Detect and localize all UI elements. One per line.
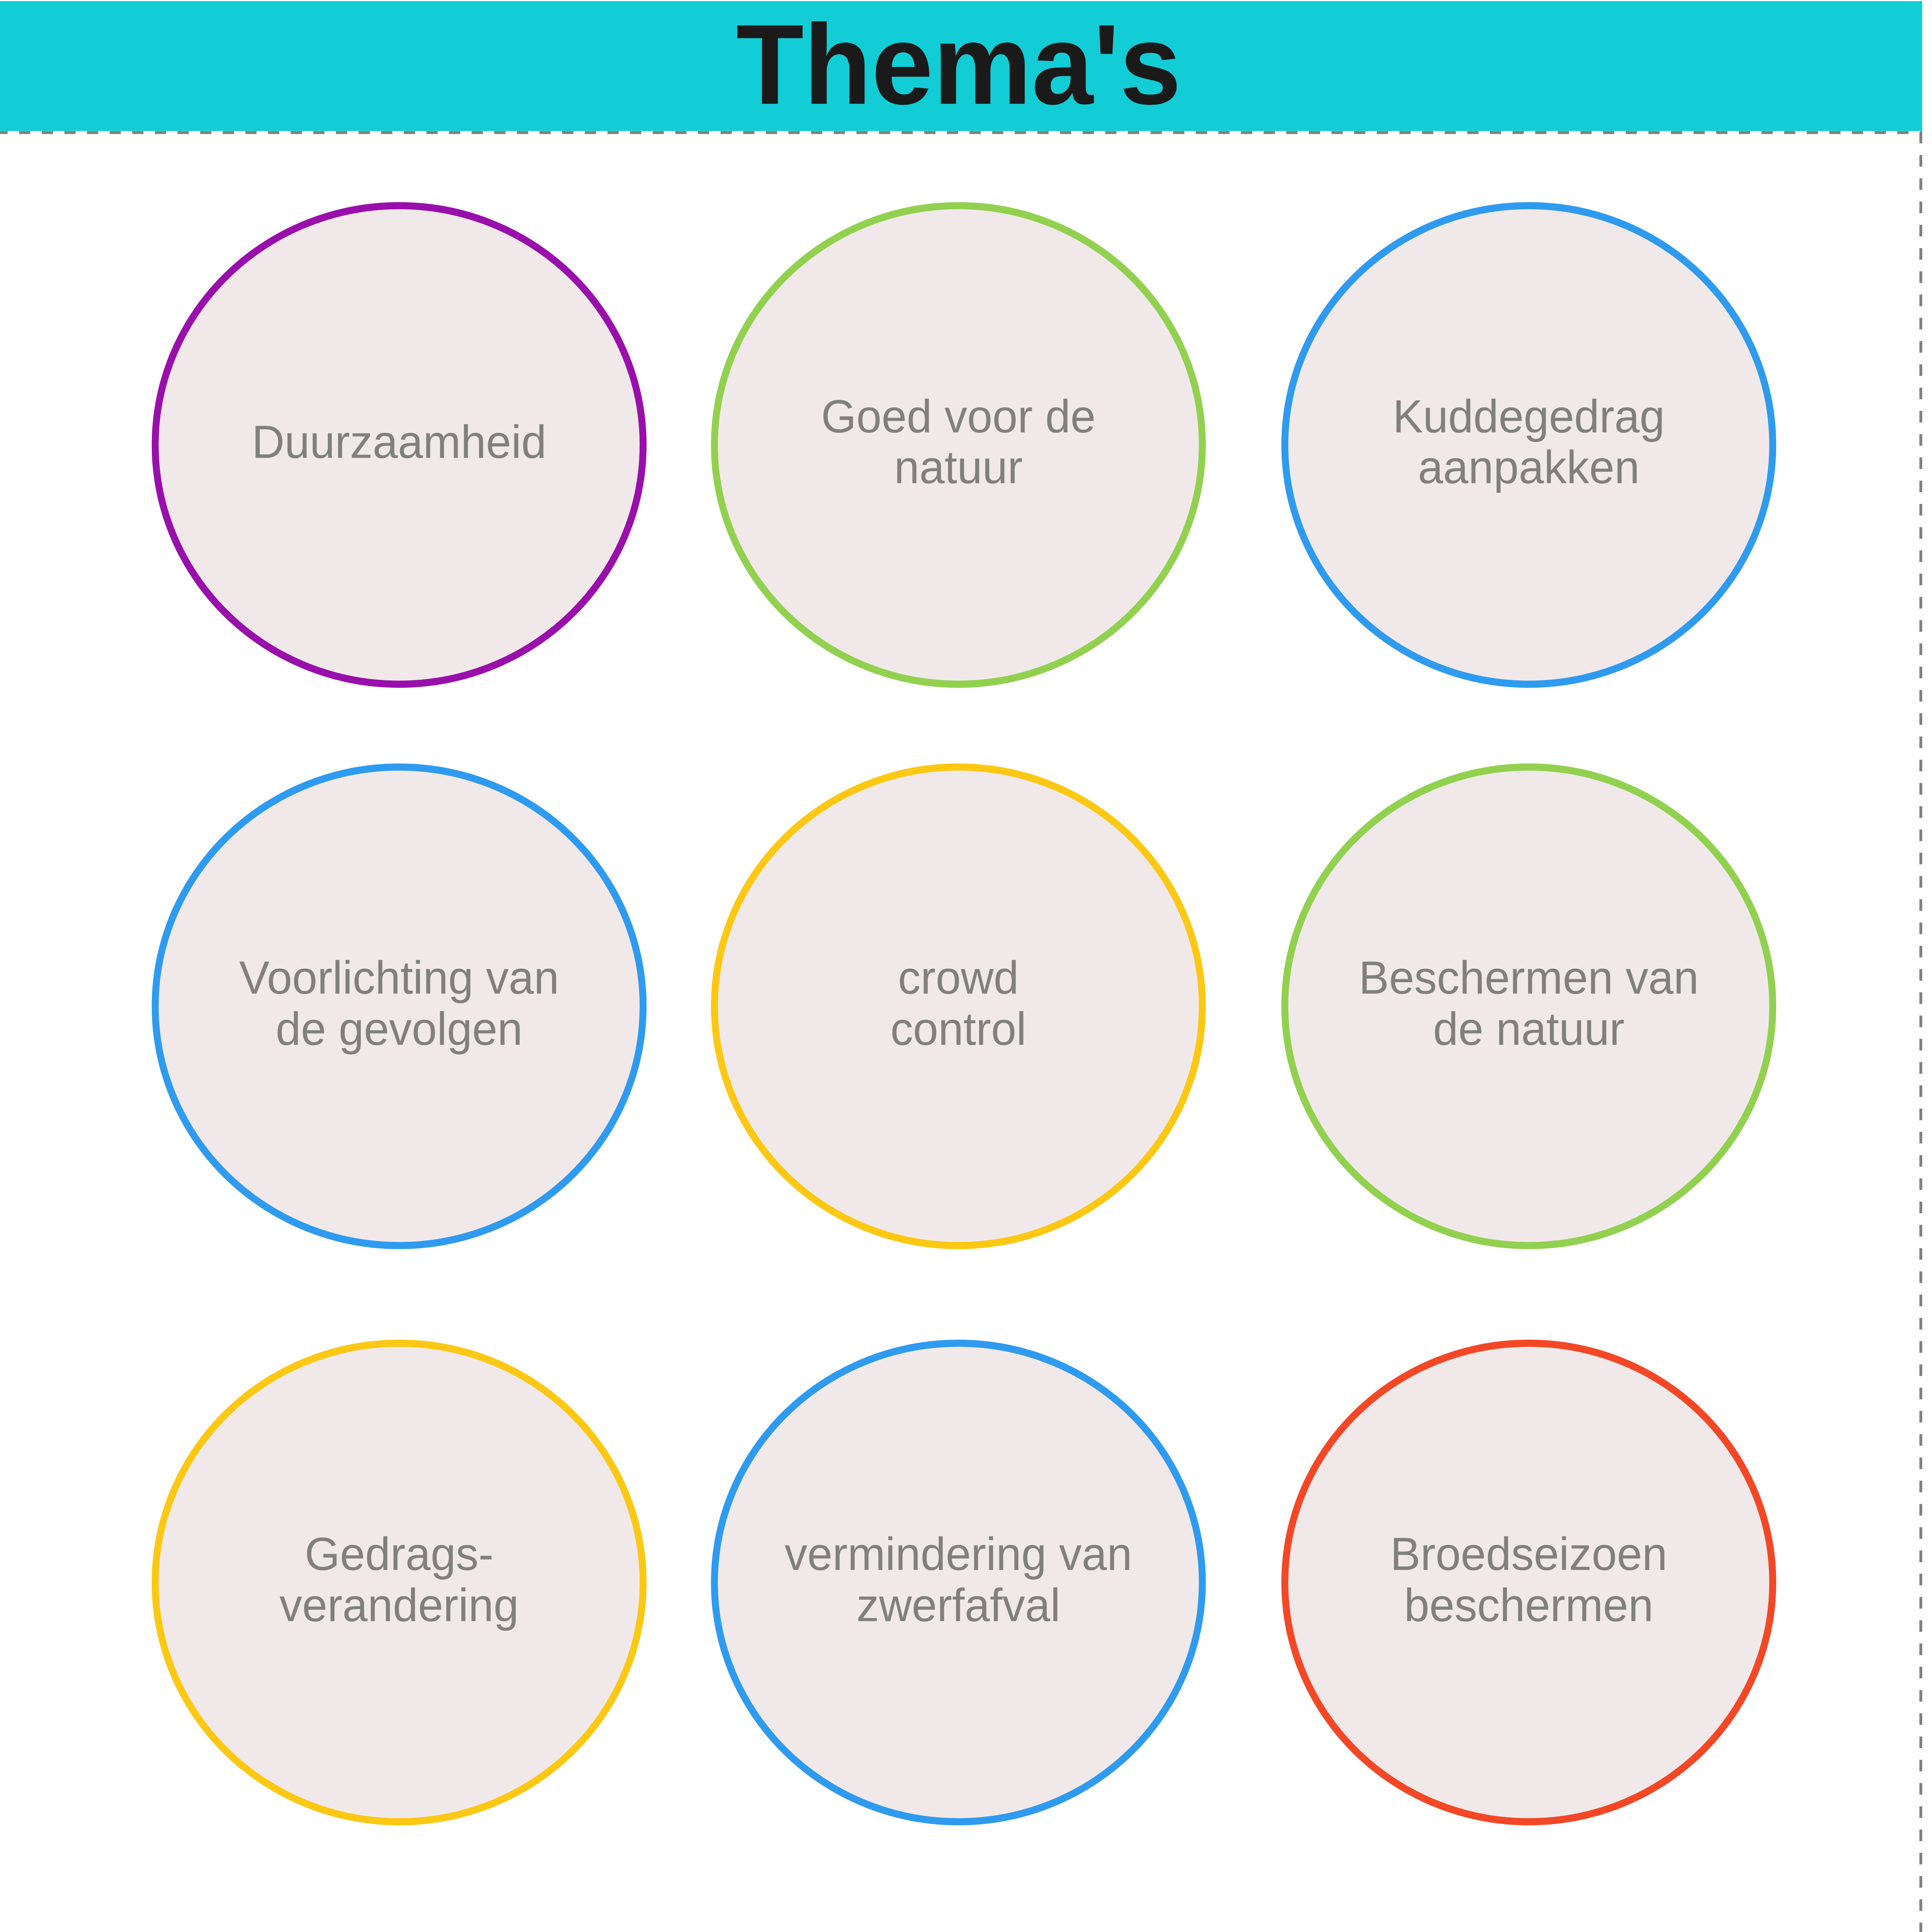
theme: vermindering van zwerfafval: vermindering van: [785, 1528, 1132, 1580]
theme: Duurzaamheid: Duurzaamheid: [252, 416, 546, 468]
theme: Goed voor de natuur: Goed voor de: [821, 390, 1095, 442]
header band: [0, 1, 1922, 131]
theme: Voorlichting van de gevolgen: de gevolgen: [276, 1003, 522, 1055]
theme: Broedseizoen beschermen: [1285, 1343, 1773, 1822]
theme: crowd control: crowd: [898, 952, 1019, 1004]
theme: Gedragsverandering: Gedrags-: [305, 1528, 493, 1580]
theme: Voorlichting van de gevolgen: Voorlichting van: [239, 952, 559, 1004]
theme: Beschermen van de natuur: [1285, 767, 1773, 1245]
theme: vermindering van zwerfafval: zwerfafval: [856, 1579, 1060, 1631]
title: Thema's: [736, 1, 1181, 128]
theme: Duurzaamheid: [155, 206, 643, 684]
theme: crowd control: control: [890, 1003, 1026, 1055]
theme: Kuddegedrag aanpakken: [1285, 206, 1773, 684]
theme: Beschermen van de natuur: de natuur: [1433, 1003, 1624, 1055]
theme: Beschermen van de natuur: Beschermen van: [1359, 952, 1699, 1004]
theme: Broedseizoen beschermen: Broedseizoen: [1390, 1528, 1667, 1580]
theme: Kuddegedrag aanpakken: aanpakken: [1418, 441, 1639, 493]
theme: Gedragsverandering: verandering: [279, 1579, 519, 1631]
theme: Gedragsverandering: [155, 1343, 643, 1822]
theme: Goed voor de natuur: natuur: [894, 441, 1022, 493]
theme: Voorlichting van de gevolgen: [155, 767, 643, 1245]
theme: vermindering van zwerfafval: [714, 1343, 1202, 1822]
theme: Goed voor de natuur: [714, 206, 1202, 684]
theme: Broedseizoen beschermen: beschermen: [1404, 1579, 1653, 1631]
theme: crowd control: [714, 767, 1202, 1245]
theme: Kuddegedrag aanpakken: Kuddegedrag: [1393, 390, 1665, 442]
